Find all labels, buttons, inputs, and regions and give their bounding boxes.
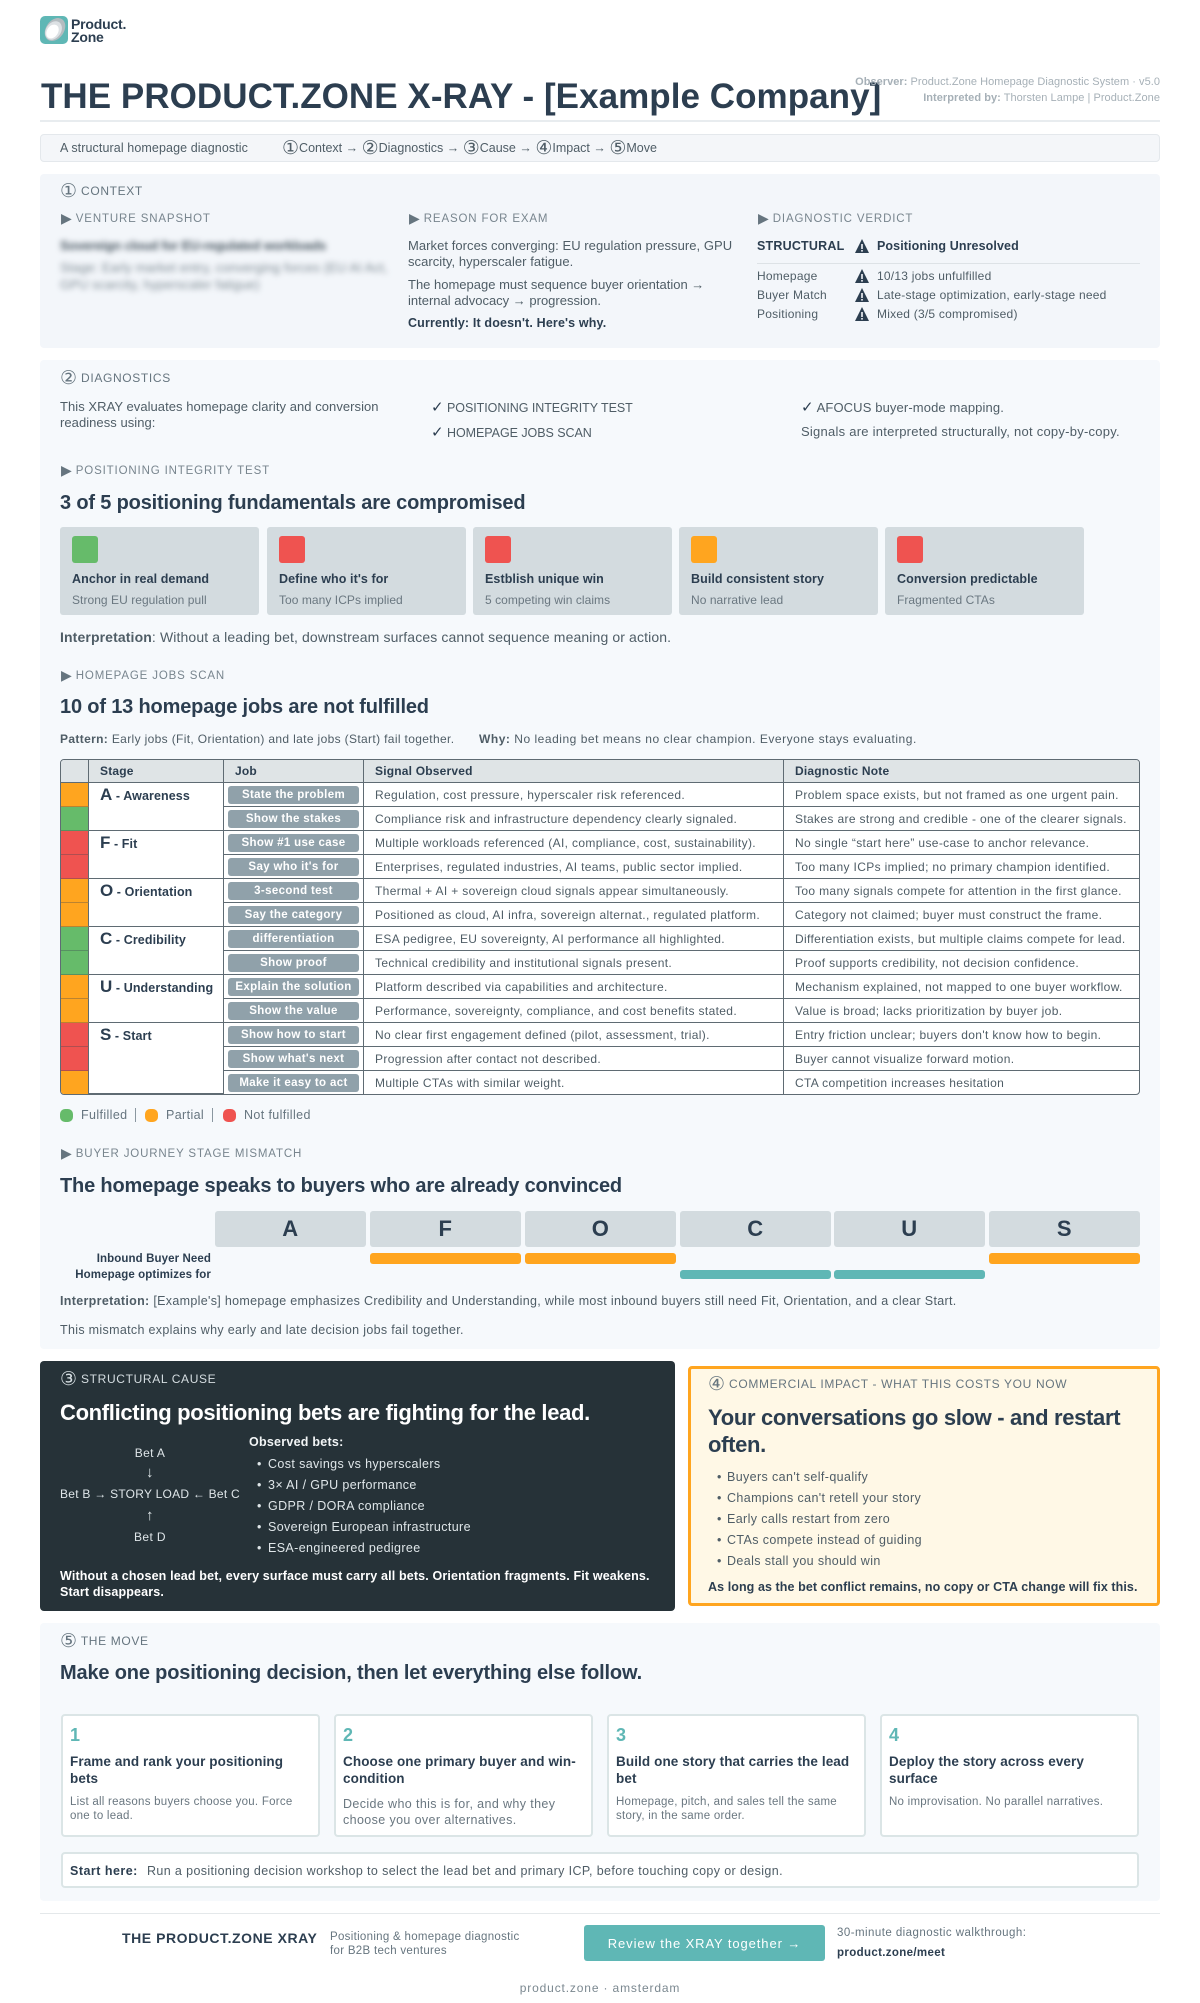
subtitle: A structural homepage diagnostic: [60, 141, 248, 155]
section label: context: ① CONTEXT: [60, 180, 143, 202]
reason for exam: The homepage must sequence buyer orientation →: [408, 277, 704, 292]
impact list: Early calls restart from zero: [727, 1512, 890, 1526]
step 1: List all reasons buyers choose you. Force: [70, 1796, 292, 1808]
step 3: story, in the same order.: [616, 1810, 745, 1822]
panel: the move: [40, 1623, 1160, 1901]
section label: the move: ⑤ THE MOVE: [60, 1630, 149, 1652]
observed bets list: 3× AI / GPU performance: [268, 1478, 417, 1492]
interpretation: mismatch: Interpretation: [Example's] homepage emphasizes Credibility and Understanding, while most inbound buyers still need Fit, Orientation, and a clear Start.: [60, 1294, 957, 1308]
step 2: condition: [343, 1771, 405, 1786]
heading: conversations: Your conversations go slow - and restart: [708, 1405, 1120, 1430]
stage: awareness: [61, 783, 1139, 831]
meeting call to action: 30-minute diagnostic walkthrough:: [837, 1927, 1026, 1939]
stage: understanding: Platform described via capabilities and architecture.: [375, 980, 668, 994]
stage: awareness: Show the stakes: [246, 812, 341, 824]
impact list: •: [717, 1491, 722, 1505]
stage: credibility: Differentiation exists, but multiple claims compete for lead.: [795, 932, 1126, 946]
structural conclusion: Without a chosen lead bet, every surface must carry all bets. Orientation fragments. Fit weakens.: [60, 1569, 650, 1583]
stage: orientation: 3-second test: [254, 884, 333, 896]
observer meta: Interpreted by: Thorsten Lampe | Product.Zone: [923, 92, 1160, 104]
start here callout: Start here:: [70, 1864, 138, 1878]
stage: start: Progression after contact not described.: [375, 1052, 601, 1066]
reason for exam: scarcity, hyperscaler fatigue.: [408, 254, 573, 269]
bet diagram: ↓: [146, 1464, 154, 1481]
diagnostic verdict: 10/13 jobs unfulfilled: [877, 269, 991, 283]
stage: credibility: ESA pedigree, EU sovereignty, AI performance all highlighted.: [375, 932, 725, 946]
reason for exam: [408, 211, 732, 330]
stage: understanding: Show the value: [249, 1004, 338, 1016]
stage: fit: [61, 831, 1139, 879]
step 1: one to lead.: [70, 1810, 133, 1822]
logo wordmark: [71, 16, 126, 45]
logo: [40, 16, 126, 45]
stage: start: No clear first engagement defined (pilot, assessment, trial).: [375, 1028, 710, 1042]
step 2: Decide who this is for, and why they: [343, 1797, 555, 1811]
button: review the xray: Review the XRAY together →: [608, 1936, 801, 1951]
impact list: Buyers can't self-qualify: [727, 1470, 868, 1484]
sub-label: positioning integrity test: ▶ POSITIONING INTEGRITY TEST: [61, 463, 270, 479]
step 1: [61, 1714, 320, 1837]
step 2: [334, 1714, 593, 1837]
step 4: surface: [889, 1771, 938, 1786]
step 1: Frame and rank your positioning: [70, 1754, 283, 1769]
panel: structural cause: [40, 1361, 675, 1611]
diagnostic verdict: Homepage: [757, 269, 818, 283]
step 3: Homepage, pitch, and sales tell the same: [616, 1796, 837, 1808]
step 4: [880, 1714, 1139, 1837]
observer meta: [855, 76, 1160, 104]
afocus mismatch chart: O: [592, 1216, 609, 1241]
venture snapshot: Stage: Early market entry, converging forces (EU AI Act,: [60, 260, 388, 275]
stage: start: Show what's next: [243, 1052, 344, 1064]
diagnostic verdict: Positioning Unresolved: [877, 239, 1019, 253]
structural conclusion: Start disappears.: [60, 1585, 164, 1599]
afocus mismatch chart: [75, 1211, 1140, 1281]
legend: [60, 1108, 311, 1122]
stage: start: Make it easy to act: [239, 1076, 348, 1088]
afocus mismatch chart: U: [901, 1216, 917, 1241]
observed bets list: •: [257, 1520, 262, 1534]
stage: understanding: Performance, sovereignty, compliance, and cost benefits stated.: [375, 1004, 737, 1018]
step 1: 1: [70, 1725, 80, 1745]
footer descriptor: Positioning & homepage diagnostic: [330, 1931, 520, 1943]
step 4: No improvisation. No parallel narratives.: [889, 1796, 1103, 1808]
card: define who it's for: Too many ICPs implied: [279, 593, 403, 607]
jobs table: Job: [235, 764, 257, 778]
stage: orientation: Say the category: [245, 908, 342, 920]
icon: product zone mark: [40, 16, 68, 44]
step 3: 3: [616, 1725, 626, 1745]
card: build consistent story: [679, 527, 878, 615]
reason for exam: ▶ REASON FOR EXAM: [409, 211, 548, 227]
section label: structural cause: ③ STRUCTURAL CAUSE: [60, 1368, 216, 1390]
impact list: CTAs compete instead of guiding: [727, 1533, 922, 1547]
stage: start: S - Start: [100, 1025, 152, 1044]
observer meta: Observer: Product.Zone Homepage Diagnostic System · v5.0: [855, 76, 1160, 88]
heading: the move: Make one positioning decision, then let everything else follow.: [60, 1662, 642, 1684]
jobs table: Stage: [100, 764, 134, 778]
stage: start: Multiple CTAs with similar weight.: [375, 1076, 565, 1090]
observed bets list: Observed bets:: [249, 1435, 344, 1449]
stage: orientation: Thermal + AI + sovereign cloud signals appear simultaneously.: [375, 884, 729, 898]
observed bets list: Sovereign European infrastructure: [268, 1520, 471, 1534]
stage: understanding: Mechanism explained, not mapped to one buyer workflow.: [795, 980, 1123, 994]
jobs table: Diagnostic Note: [795, 764, 889, 778]
card: anchor in real demand: [60, 527, 259, 615]
stage: fit: Enterprises, regulated industries, AI teams, public sector implied.: [375, 860, 743, 874]
diagnostic verdict: STRUCTURAL: [757, 239, 844, 253]
diagnostic verdict: Late-stage optimization, early-stage need: [877, 288, 1107, 302]
stage: fit: Multiple workloads referenced (AI, compliance, cost, sustainability).: [375, 836, 756, 850]
step 4: Deploy the story across every: [889, 1754, 1084, 1769]
step 1: bets: [70, 1771, 98, 1786]
stage: credibility: C - Credibility: [100, 929, 186, 948]
impact list: Deals stall you should win: [727, 1554, 881, 1568]
step 2: 2: [343, 1725, 353, 1745]
blurred venture text: Sovereign cloud for EU-regulated workloads: [60, 238, 326, 253]
reason for exam: Market forces converging: EU regulation pressure, GPU: [408, 238, 732, 253]
stage: start: Show how to start: [241, 1028, 346, 1040]
jobs table: [60, 759, 1140, 1095]
afocus mismatch chart: S: [1057, 1216, 1072, 1241]
stage: credibility: Show proof: [260, 956, 327, 968]
stage: awareness: Regulation, cost pressure, hyperscaler risk referenced.: [375, 788, 685, 802]
legend: Fulfilled: [81, 1108, 128, 1122]
card: establish unique win: [473, 527, 672, 615]
afocus mismatch chart: A: [282, 1216, 298, 1241]
step 2: Choose one primary buyer and win-: [343, 1754, 576, 1769]
stage: start: Entry friction unclear; buyers don't know how to begin.: [795, 1028, 1101, 1042]
observed bets list: •: [257, 1457, 262, 1471]
title: THE PRODUCT.ZONE X-RAY - [Example Company]: [41, 77, 881, 116]
panel: diagnostics: [40, 360, 1160, 1349]
afocus mismatch chart: Homepage optimizes for: [75, 1269, 211, 1281]
step 4: 4: [889, 1725, 899, 1745]
afocus mismatch chart: F: [439, 1216, 452, 1241]
card: define who it's for: [267, 527, 466, 615]
start here callout: Run a positioning decision workshop to select the lead bet and primary ICP, before touching copy or design.: [147, 1864, 783, 1878]
stage: awareness: Compliance risk and infrastructure dependency clearly signaled.: [375, 812, 737, 826]
step 2: choose you over alternatives.: [343, 1813, 517, 1827]
stage: orientation: Positioned as cloud, AI infra, sovereign alternat., regulated platform.: [375, 908, 760, 922]
icon: warning: [855, 307, 869, 321]
diagnostics intro: readiness using:: [60, 415, 155, 430]
logo wordmark: Zone: [71, 29, 104, 45]
impact conclusion: As long as the bet conflict remains, no copy or CTA change will fix this.: [708, 1580, 1138, 1594]
legend: Partial: [166, 1108, 204, 1122]
heading: positioning fundamentals: 3 of 5 positioning fundamentals are compromised: [60, 492, 525, 514]
venture snapshot: GPU scarcity, hyperscaler fatigue): [60, 277, 260, 292]
venture snapshot: ▶ VENTURE SNAPSHOT: [61, 211, 211, 227]
stage: start: CTA competition increases hesitation: [795, 1076, 1004, 1090]
logo wordmark: Product.: [71, 16, 126, 32]
impact list: •: [717, 1512, 722, 1526]
heading: conflicting bets: Conflicting positioning bets are fighting for the lead.: [60, 1400, 590, 1425]
heading: buyer mismatch: The homepage speaks to buyers who are already convinced: [60, 1175, 622, 1197]
legend: Not fulfilled: [244, 1108, 311, 1122]
icon: warning: [855, 288, 869, 302]
icon: warning: [855, 269, 869, 283]
stage: start: [61, 1023, 1139, 1094]
stage: awareness: Problem space exists, but not framed as one urgent pain.: [795, 788, 1119, 802]
stage: credibility: differentiation: [253, 932, 334, 944]
afocus mismatch chart: Inbound Buyer Need: [97, 1253, 211, 1265]
diagnostic verdict: [757, 211, 1140, 321]
meeting link: product.zone/meet: [837, 1947, 945, 1959]
bet diagram: Bet A: [135, 1446, 165, 1460]
diagnostic verdict: Positioning: [757, 307, 818, 321]
heading: conversations: often.: [708, 1432, 766, 1457]
impact list: •: [717, 1554, 722, 1568]
stage: understanding: U - Understanding: [100, 977, 213, 996]
footer brand: THE PRODUCT.ZONE XRAY: [122, 1930, 317, 1946]
diagnostics intro: ✓ HOMEPAGE JOBS SCAN: [431, 423, 592, 441]
stage: fit: Too many ICPs implied; no primary champion identified.: [795, 860, 1110, 874]
observed bets list: •: [257, 1541, 262, 1555]
diagnostic verdict: Buyer Match: [757, 288, 827, 302]
stage: understanding: [61, 975, 1139, 1023]
card: conversion predictable: Fragmented CTAs: [897, 593, 995, 607]
stage: fit: F - Fit: [100, 833, 137, 852]
stage: awareness: State the problem: [242, 788, 345, 800]
step 3: bet: [616, 1771, 637, 1786]
stage: orientation: Too many signals compete for attention in the first glance.: [795, 884, 1122, 898]
why: Why: No leading bet means no clear champion. Everyone stays evaluating.: [479, 732, 917, 746]
diagnostics intro: ✓ POSITIONING INTEGRITY TEST: [431, 398, 633, 416]
footer location: product.zone · amsterdam: [520, 1981, 680, 1995]
card: build consistent story: Build consistent story: [691, 572, 824, 586]
afocus mismatch chart: C: [747, 1216, 763, 1241]
mismatch conclusion: This mismatch explains why early and late decision jobs fail together.: [60, 1323, 464, 1337]
bet diagram: ↑: [146, 1507, 154, 1524]
stage: understanding: Explain the solution: [235, 980, 352, 992]
section label: commercial impact: ④ COMMERCIAL IMPACT - WHAT THIS COSTS YOU NOW: [708, 1373, 1067, 1395]
stage: orientation: [61, 879, 1139, 927]
footer descriptor: for B2B tech ventures: [330, 1945, 447, 1957]
impact list: [717, 1470, 922, 1568]
pattern: Pattern: Early jobs (Fit, Orientation) and late jobs (Start) fail together.: [60, 732, 454, 746]
stage: awareness: Stakes are strong and credible - one of the clearer signals.: [795, 812, 1127, 826]
card: establish unique win: 5 competing win claims: [485, 593, 610, 607]
impact list: Champions can't retell your story: [727, 1491, 921, 1505]
stage: credibility: Proof supports credibility, not decision confidence.: [795, 956, 1079, 970]
process steps: ①Context → ②Diagnostics → ③Cause → ④Impact → ⑤Move: [282, 137, 657, 159]
step 3: Build one story that carries the lead: [616, 1754, 849, 1769]
interpretation: positioning: Interpretation: Without a leading bet, downstream surfaces cannot sequence meaning or action.: [60, 629, 671, 645]
stage: fit: Say who it's for: [248, 860, 339, 872]
jobs table: Signal Observed: [375, 764, 473, 778]
card: establish unique win: Estblish unique win: [485, 572, 604, 586]
button: review the xray: [584, 1925, 825, 1961]
stage: orientation: Category not claimed; buyer must construct the frame.: [795, 908, 1102, 922]
venture snapshot: [57, 211, 388, 294]
diagnostics intro: ✓ AFOCUS buyer-mode mapping.: [801, 398, 1004, 416]
observed bets list: •: [257, 1478, 262, 1492]
heading: homepage jobs: 10 of 13 homepage jobs are not fulfilled: [60, 696, 429, 718]
stage: credibility: [61, 927, 1139, 975]
footer: [122, 1925, 1026, 1995]
reason for exam: internal advocacy → progression.: [408, 293, 601, 308]
sub-label: homepage jobs scan: ▶ HOMEPAGE JOBS SCAN: [61, 668, 225, 684]
section label: diagnostics: ② DIAGNOSTICS: [60, 367, 171, 389]
stage: credibility: Technical credibility and institutional signals present.: [375, 956, 672, 970]
stage: orientation: O - Orientation: [100, 881, 192, 900]
card: anchor in real demand: Anchor in real demand: [72, 572, 209, 586]
heading: conversations: [708, 1405, 1120, 1457]
card: conversion predictable: Conversion predictable: [897, 572, 1038, 586]
observed bets list: [249, 1435, 471, 1555]
panel: commercial impact: [688, 1366, 1160, 1606]
card: define who it's for: Define who it's for: [279, 572, 388, 586]
diagnostic verdict: ▶ DIAGNOSTIC VERDICT: [758, 211, 913, 227]
step 3: [607, 1714, 866, 1837]
diagnostics intro: This XRAY evaluates homepage clarity and conversion: [60, 399, 379, 414]
sub-label: buyer journey stage mismatch: ▶ BUYER JOURNEY STAGE MISMATCH: [61, 1146, 302, 1162]
reason for exam: Currently: It doesn't. Here's why.: [408, 316, 606, 330]
impact list: •: [717, 1533, 722, 1547]
card: anchor in real demand: Strong EU regulation pull: [72, 593, 207, 607]
diagnostic verdict: Mixed (3/5 compromised): [877, 307, 1018, 321]
subtitle bar with process steps: [40, 134, 1160, 162]
observed bets list: •: [257, 1499, 262, 1513]
stage: understanding: Value is broad; lacks prioritization by buyer job.: [795, 1004, 1062, 1018]
start here callout: [61, 1852, 1139, 1888]
bet diagram: [60, 1446, 240, 1544]
impact list: •: [717, 1470, 722, 1484]
diagnostics intro: [60, 398, 1120, 441]
footer descriptor: [330, 1931, 520, 1957]
observed bets list: ESA-engineered pedigree: [268, 1541, 421, 1555]
bet diagram: Bet B → STORY LOAD ← Bet C: [60, 1487, 240, 1501]
diagnostics intro: Signals are interpreted structurally, not copy-by-copy.: [801, 424, 1120, 439]
observed bets list: Cost savings vs hyperscalers: [268, 1457, 441, 1471]
stage: fit: No single “start here” use-case to anchor relevance.: [795, 836, 1089, 850]
icon: warning: [855, 239, 869, 253]
stage: fit: Show #1 use case: [241, 836, 346, 848]
observed bets list: GDPR / DORA compliance: [268, 1499, 425, 1513]
stage: awareness: A - Awareness: [100, 785, 190, 804]
bet diagram: Bet D: [134, 1530, 166, 1544]
stage: start: Buyer cannot visualize forward motion.: [795, 1052, 1014, 1066]
card: conversion predictable: [885, 527, 1084, 615]
card: build consistent story: No narrative lead: [691, 593, 783, 607]
structural conclusion: [60, 1569, 650, 1599]
panel: context: [40, 174, 1160, 348]
